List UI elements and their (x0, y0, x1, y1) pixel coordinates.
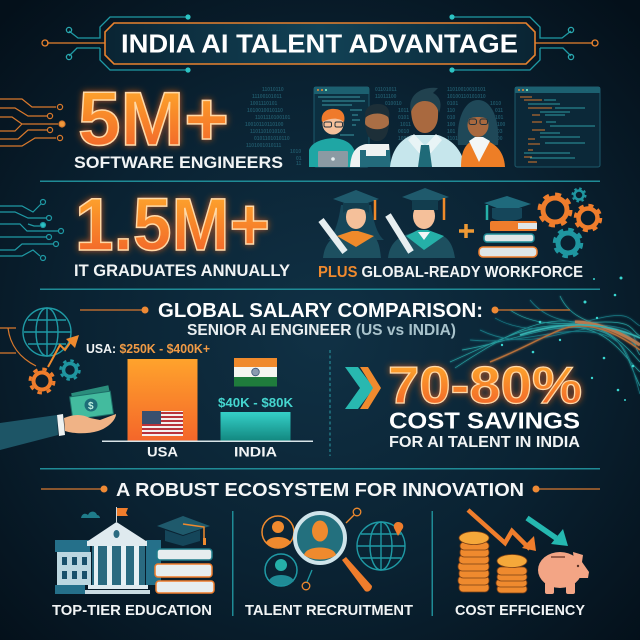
caption: SOFTWARE ENGINEERS (74, 153, 283, 172)
for AI talent: FOR AI TALENT IN INDIA (389, 434, 580, 451)
caption: TOP-TIER EDUCATION (52, 602, 212, 619)
binary backdrop: 03 (497, 129, 503, 135)
binary backdrop: 1101 (447, 136, 458, 142)
orange down arrow (468, 510, 536, 551)
binary backdrop: 11011100 (375, 94, 397, 100)
binary backdrop: 010 (447, 115, 456, 121)
India label: INDIA (234, 444, 277, 460)
axis (102, 440, 313, 442)
binary backdrop: 0101 (447, 101, 458, 107)
woman graduate (321, 190, 384, 258)
title circuits (42, 14, 598, 73)
USA flag (142, 411, 183, 436)
USA label: USA (147, 444, 178, 460)
binary backdrop: 010010 (385, 101, 402, 107)
graduates illustration (318, 188, 600, 281)
binary backdrop: 011 (495, 108, 503, 114)
binary backdrop: 11010110 (262, 87, 284, 93)
wave particles (501, 276, 634, 401)
man graduate (388, 188, 455, 258)
salary bar chart (86, 342, 313, 460)
teal circuit (0, 200, 64, 260)
coin stack tall (458, 532, 489, 592)
gears (30, 360, 80, 393)
binary backdrop: 1101110100101 (255, 115, 291, 121)
flag (116, 507, 128, 522)
binary backdrop: 1010010010110 (247, 108, 283, 114)
circuit stub (0, 328, 36, 366)
data wave (450, 296, 640, 394)
salary heading (80, 300, 570, 339)
binary backdrop: 1011 (398, 108, 409, 114)
heading connector right (492, 306, 570, 314)
binary backdrop: 101 (447, 129, 456, 135)
globe (357, 522, 405, 570)
binary backdrop: 0010 (398, 129, 409, 135)
cap (157, 516, 210, 546)
binary backdrop: 1001110101 (250, 101, 277, 107)
chevrons (345, 367, 381, 409)
title banner (42, 14, 598, 73)
binary backdrop: 11010010010101 (447, 87, 486, 93)
divider (40, 180, 600, 182)
bearded engineer (350, 104, 391, 167)
stat: software engineers (0, 77, 283, 172)
wings (55, 540, 161, 585)
column separator (432, 511, 433, 616)
magnifier (295, 513, 372, 592)
India value label: $40K - $80K (218, 396, 293, 410)
column: cost efficiency (455, 510, 589, 619)
binary backdrop: 01101011 (375, 87, 397, 93)
cloud (81, 512, 100, 518)
books and cap (479, 196, 537, 257)
column: education (52, 507, 214, 619)
India bar (220, 412, 290, 441)
binary backdrop: 100 (497, 122, 506, 128)
binary backdrop: 1010 (490, 101, 501, 107)
binary backdrop: 11100101011 (252, 94, 282, 100)
code window right (515, 87, 600, 167)
sleeve (0, 415, 58, 450)
binary backdrop: 10911 (398, 136, 412, 142)
binary backdrop: 00 (497, 136, 503, 142)
stat: IT graduates (0, 183, 291, 280)
globe and growth icon (0, 308, 80, 393)
connector left (41, 486, 108, 492)
caption: TALENT RECRUITMENT (245, 602, 413, 619)
nodes (302, 508, 361, 590)
binary backdrop: 01 (296, 156, 302, 162)
binary backdrop: 1101101010101 (250, 129, 286, 135)
USA value label: USA: $250K - $400K+ (86, 342, 210, 356)
growth arrow (48, 340, 72, 367)
location pin (394, 522, 403, 536)
orange candidate (262, 516, 294, 548)
teal candidate (265, 554, 297, 586)
plus sign (459, 224, 474, 238)
dashed separator (329, 350, 331, 456)
binary backdrop: 1010 (290, 149, 301, 155)
binary backdrop (245, 87, 506, 167)
portico (55, 522, 150, 594)
banknotes: $ (88, 401, 94, 412)
coin stack short (496, 554, 527, 593)
percent: 70-80% (388, 357, 582, 415)
caption: IT GRADUATES ANNUALLY (74, 261, 291, 280)
column separator (232, 511, 234, 616)
caption: COST EFFICIENCY (455, 602, 585, 619)
savings callout (345, 357, 582, 451)
engineers illustration (245, 87, 600, 167)
binary backdrop: 0101101010110 (254, 136, 290, 142)
gears (540, 188, 600, 256)
woman engineer (458, 100, 505, 167)
hand holding money (0, 385, 116, 450)
binary backdrop: 1101001010111 (246, 143, 282, 149)
big number: 1.5M+ (75, 183, 270, 266)
divider (40, 468, 600, 470)
globe (23, 308, 71, 356)
India flag (234, 358, 277, 386)
connector right (532, 486, 600, 492)
heading text: A ROBUST ECOSYSTEM FOR INNOVATION (116, 479, 524, 500)
big number: 5M+ (78, 77, 229, 162)
divider (40, 288, 600, 290)
binary backdrop: 11 (296, 161, 302, 167)
piggy bank (538, 552, 589, 594)
hand (64, 414, 116, 433)
title frame (105, 23, 535, 64)
binary backdrop: 101 (495, 115, 504, 121)
ecosystem heading (41, 479, 600, 500)
lead engineer (390, 88, 465, 167)
workforce caption: PLUS GLOBAL-READY WORKFORCE (318, 264, 583, 281)
teal down arrow (527, 518, 568, 546)
binary backdrop: 10010110110100 (245, 122, 284, 128)
engineer with laptop (309, 109, 355, 167)
books (155, 549, 214, 593)
binary backdrop: 0101 (398, 115, 409, 121)
title text: INDIA AI TALENT ADVANTAGE (121, 28, 518, 58)
sub heading: SENIOR AI ENGINEER (US vs INDIA) (187, 322, 456, 339)
heading text: GLOBAL SALARY COMPARISON: (158, 300, 483, 322)
heading connector left (80, 306, 148, 314)
USA bar (128, 359, 198, 441)
binary backdrop: 10100110101010 (447, 94, 486, 100)
orange circuit (0, 99, 65, 146)
binary backdrop: 100 (447, 122, 456, 128)
column: recruitment (245, 508, 413, 619)
cost savings: COST SAVINGS (389, 408, 580, 434)
binary backdrop: 1011 (400, 122, 411, 128)
binary backdrop: 110 (447, 108, 455, 114)
cuff (57, 414, 65, 436)
code window left (314, 87, 369, 167)
